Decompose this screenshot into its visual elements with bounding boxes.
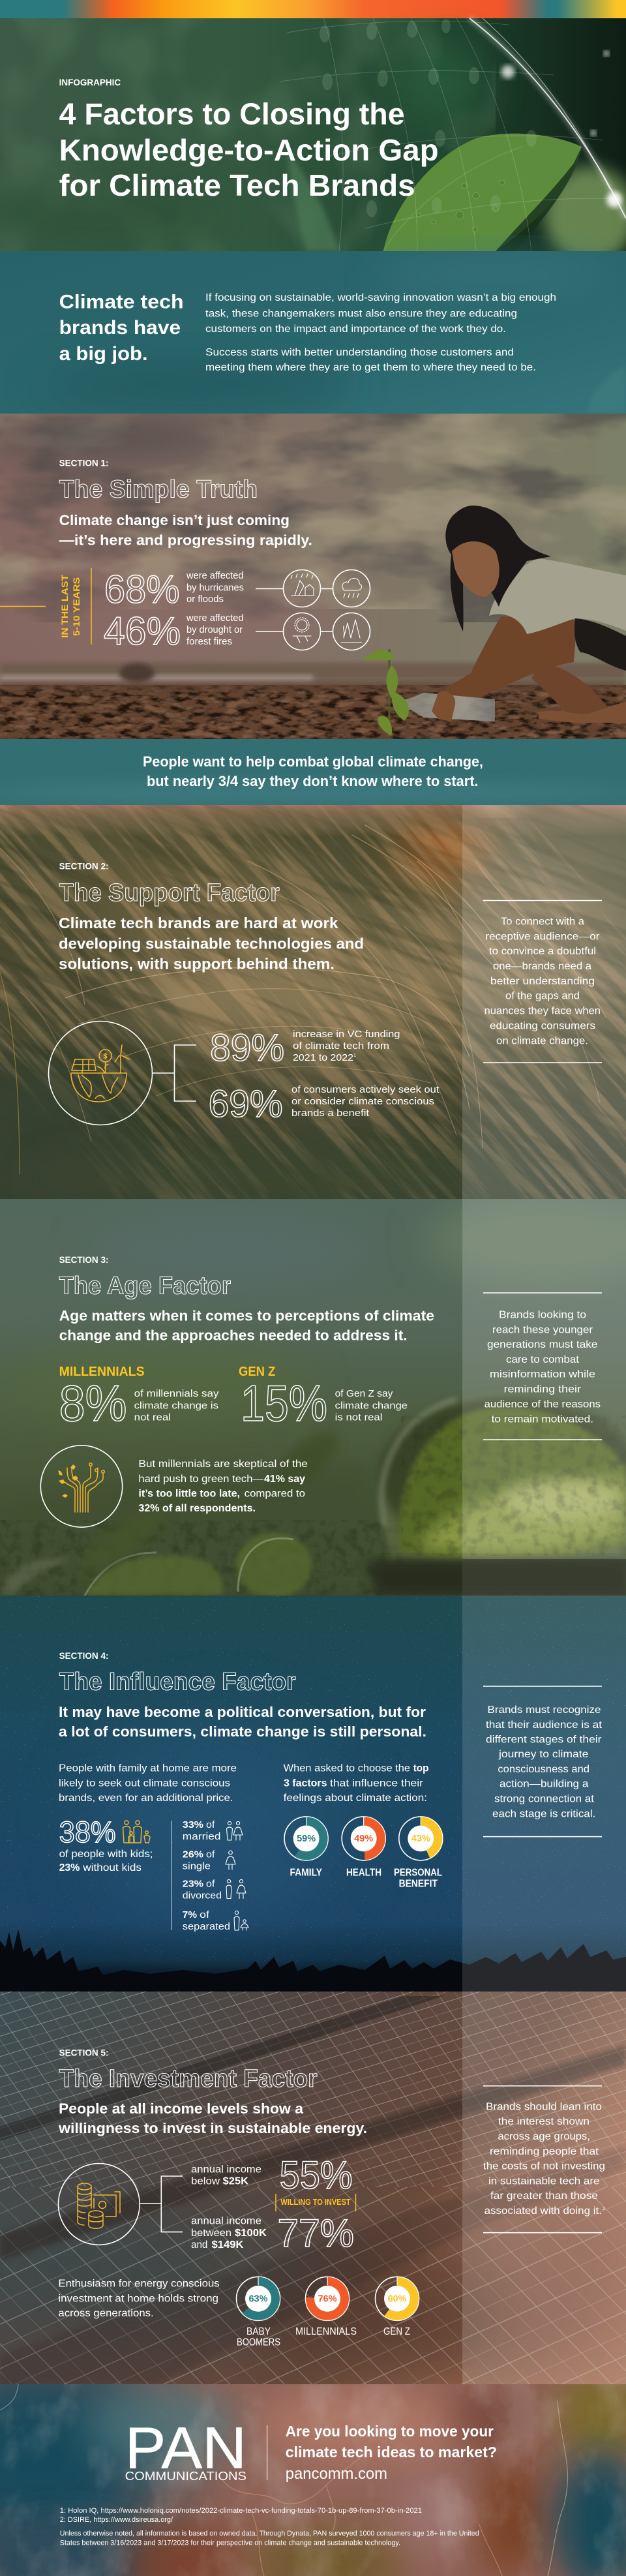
intro heading: Climate tech [59, 291, 184, 313]
callout: support takeaway: receptive audience—or [485, 932, 600, 942]
stat: gen z 15 percent [239, 1365, 408, 1432]
stat: millennials 8 percent: MILLENNIALS [59, 1365, 145, 1379]
panel: transition statement [0, 739, 626, 805]
stat: marital status breakdown: of [206, 1879, 215, 1890]
stat: marital status breakdown [183, 1819, 248, 1932]
callout: age takeaway [483, 1293, 602, 1440]
stat: 55 percent below 25k: annual income [191, 2164, 261, 2175]
panel: big job intro [0, 251, 626, 414]
main title: Knowledge-to-Action Gap [59, 133, 439, 167]
stat: 69 percent consumers [209, 1083, 440, 1125]
callout: influence takeaway: Brands must recognize [488, 1705, 601, 1716]
stat: 77 percent 100k to 149k: annual income [191, 2216, 261, 2227]
stat: 46 percent drought: forest fires [186, 636, 232, 647]
stat: 89 percent VC funding: 89% [210, 1027, 284, 1069]
section subheading [59, 512, 312, 548]
stat: 89 percent VC funding: 2021 to 2022 [293, 1052, 353, 1063]
callout: age takeaway: reminding their [504, 1384, 582, 1395]
stat: marital status breakdown: divorced [183, 1890, 222, 1901]
callout: support takeaway: educating consumers [490, 1020, 595, 1032]
stat: 38 percent with kids: 38% [59, 1815, 116, 1849]
photo: treeline silhouette [0, 1930, 626, 1992]
callout: investment takeaway: 2 [603, 2207, 605, 2211]
intro body text: task, these changemakers must also ensure they are educating [205, 308, 517, 320]
stat: 68 percent hurricanes: 68% [104, 568, 180, 611]
chart: baby boomers donut: 63% [248, 2294, 268, 2304]
intro body text [205, 292, 556, 373]
text: family at home: brands, even for an additional price. [59, 1793, 233, 1804]
intro body text: Success starts with better understanding those customers and [205, 347, 514, 358]
callout: support takeaway: of the gaps and [505, 991, 580, 1002]
section subheading: It may have become a political conversation, but for [59, 1704, 426, 1720]
callout: investment takeaway: associated with doing it. [484, 2205, 602, 2217]
chart: personal benefit donut [394, 1817, 443, 1890]
section heading: The Investment Factor [59, 2065, 318, 2093]
callout: support takeaway: To connect with a [501, 916, 584, 928]
child hair [445, 506, 551, 631]
callout: time range [0, 568, 91, 644]
section label: SECTION 2: [59, 861, 108, 871]
stat: 46 percent drought: by drought or [186, 624, 243, 635]
intro heading: brands have [59, 317, 181, 339]
hero panel [0, 18, 626, 264]
section subheading: Climate tech brands are hard at work [59, 915, 338, 932]
stat: marital status breakdown: separated [183, 1921, 230, 1932]
stat: 69 percent consumers: or consider climate conscious [291, 1096, 434, 1107]
section label: SECTION 4: [59, 1650, 108, 1661]
intro body text: meeting them where they are to get them to where they need to be. [205, 362, 536, 373]
footnotes and sources: States between 3/16/2023 and 3/17/2023 for their perspective on climate change and sustainable technology. [60, 2539, 400, 2547]
callout: support takeaway: nuances they face when [484, 1006, 601, 1016]
stat: 77 percent 100k to 149k: between [191, 2228, 231, 2239]
stat: marital status breakdown: 26% [183, 1849, 203, 1860]
logo: PAN Communications: COMMUNICATIONS [125, 2470, 246, 2483]
stat: gen z 15 percent: climate change [335, 1400, 408, 1411]
call to action text [286, 2423, 497, 2483]
panel: section 3 the age factor [0, 1194, 626, 1598]
chart: millennials donut: 76% [318, 2294, 337, 2304]
section label: SECTION 3: [59, 1254, 108, 1265]
stat: gen z 15 percent: 15% [241, 1374, 327, 1432]
stat: 77 percent 100k to 149k: $100K [235, 2228, 267, 2239]
text: top 3 factors: that influence their [330, 1778, 423, 1789]
stat: millennials 8 percent: of millennials say [134, 1388, 219, 1399]
callout: support takeaway: to convince a doubtful [489, 946, 596, 957]
stat: 89 percent VC funding: of climate tech from [293, 1040, 389, 1052]
section subheading: solutions, with support behind them. [59, 956, 335, 973]
callout: influence takeaway: action—building a [499, 1779, 589, 1790]
call to action text: Are you looking to move your [286, 2423, 494, 2440]
photo: child planting sapling [363, 506, 626, 736]
top colour bar [0, 0, 626, 18]
stat: 55 percent below 25k: 55% [280, 2153, 353, 2197]
chart: health donut [342, 1817, 385, 1879]
text: family at home [59, 1763, 237, 1804]
text: top 3 factors: When asked to choose the [284, 1763, 410, 1774]
text: millennial skepticism: 32% of all respondents. [138, 1503, 256, 1514]
stat: 38 percent with kids: 23% [59, 1862, 80, 1873]
panel: section 1 the simple truth [0, 411, 626, 740]
text: millennial skepticism: But millennials are skeptical of the [138, 1459, 308, 1470]
chart: baby boomers donut: BABY [246, 2326, 271, 2337]
chart: health donut: HEALTH [346, 1868, 381, 1879]
section heading: The Influence Factor [59, 1669, 296, 1696]
stat: 89 percent VC funding: 1 [353, 1053, 356, 1058]
text: enthusiasm statement: across generations. [58, 2308, 154, 2319]
section subheading [58, 2100, 367, 2136]
main title [59, 97, 439, 202]
stat: 69 percent consumers: of consumers actively seek out [291, 1084, 440, 1095]
stat: millennials 8 percent: not real [134, 1412, 171, 1423]
section subheading: —it’s here and progressing rapidly. [59, 532, 312, 548]
callout: investment takeaway: the costs of not investing [483, 2160, 605, 2172]
icon: family [123, 1821, 150, 1843]
section subheading: Climate change isn’t just coming [59, 512, 290, 528]
footnotes and sources: 2: DSIRE, https://www.dsireusa.org/ [60, 2516, 173, 2524]
chart: gen z donut: GEN Z [383, 2326, 410, 2337]
panel: transition statement: People want to help combat global climate change, [143, 753, 483, 770]
stat: 55 percent below 25k: $25K [223, 2176, 249, 2187]
stat: 68 percent hurricanes: were affected [186, 570, 244, 581]
stat: 38 percent with kids: without kids [82, 1862, 142, 1873]
callout: influence takeaway: journey to climate [498, 1749, 589, 1760]
icon: earth with renewable energy [48, 1022, 196, 1125]
callout: investment takeaway: reminding people that [490, 2146, 599, 2157]
stat: 38 percent with kids: of people with kids; [59, 1849, 153, 1860]
stat: gen z 15 percent: of Gen Z say [335, 1388, 393, 1399]
text: enthusiasm statement [58, 2278, 220, 2319]
text: top 3 factors: top [413, 1763, 429, 1774]
chart: millennials donut [295, 2277, 357, 2337]
panel: section 5 the investment factor [0, 1992, 626, 2394]
section subheading [59, 1704, 426, 1740]
stat: millennials 8 percent [59, 1365, 219, 1432]
stat: marital status breakdown: 33% [183, 1819, 203, 1830]
panel: section 2 the support factor [0, 805, 626, 1199]
stat: 77 percent 100k to 149k: 77% [278, 2211, 354, 2255]
callout: influence takeaway: consciousness and [498, 1764, 589, 1775]
section subheading: developing sustainable technologies and [59, 935, 364, 952]
text: millennial skepticism [138, 1459, 308, 1514]
callout: support takeaway: one—brands need a [493, 961, 591, 972]
call to action text: pancomm.com [286, 2465, 387, 2483]
stat: 55 percent below 25k [191, 2153, 353, 2197]
section subheading: change and the approaches needed to address it. [59, 1327, 408, 1344]
callout: investment takeaway: far greater than those [490, 2190, 598, 2202]
main title: for Climate Tech Brands [59, 168, 415, 202]
callout: influence takeaway: strong connection at [494, 1794, 595, 1805]
section heading: The Support Factor [59, 879, 280, 907]
text: millennial skepticism: it’s too little too late, [138, 1489, 240, 1500]
section label: SECTION 1: [59, 458, 108, 468]
text: top 3 factors: 3 factors [284, 1778, 327, 1789]
section heading: The Simple Truth [59, 476, 258, 503]
section subheading: willingness to invest in sustainable energy. [58, 2120, 367, 2136]
stat: 68 percent hurricanes: or floods [186, 594, 224, 605]
stat: marital status breakdown: single [183, 1860, 211, 1872]
chart: baby boomers donut: BOOMERS [237, 2337, 280, 2348]
text: family at home: People with family at home are more [59, 1763, 237, 1774]
callout: influence takeaway [483, 1686, 603, 1837]
icon: circuit tree [40, 1446, 123, 1527]
callout: support takeaway: better understanding [490, 976, 595, 987]
stat: gen z 15 percent: GEN Z [239, 1365, 275, 1379]
chart: family donut: 59% [297, 1834, 316, 1844]
chart: gen z donut [376, 2277, 419, 2337]
stat: 69 percent consumers: brands a benefit [291, 1108, 370, 1119]
footnotes and sources: 1: Holon IQ, https://www.holoniq.com/notes/2022-climate-tech-vc-funding-totals-70-1b-up-89-from-37-0b-in-2021 [60, 2507, 422, 2515]
main title: 4 Factors to Closing the [59, 97, 405, 130]
callout: age takeaway: to remain motivated. [492, 1414, 593, 1425]
stat: 77 percent 100k to 149k: $149K [211, 2239, 244, 2250]
callout: age takeaway: care to combat [506, 1354, 580, 1365]
photo: windblown grass [0, 805, 626, 1199]
stat: marital status breakdown: of [206, 1819, 215, 1830]
footnotes and sources: Unless otherwise noted, all information is based on owned data. Through Dynata, PAN surveyed 1000 consumers age 18+ in the United [60, 2530, 479, 2538]
chart: family donut [284, 1817, 328, 1879]
callout: investment takeaway: in sustainable tech are [488, 2176, 600, 2187]
photo: dew drops on leaf [0, 1393, 626, 1598]
callout: willing to invest [276, 2194, 356, 2211]
stat: marital status breakdown: 23% [183, 1879, 203, 1890]
photo: solar panel field [0, 1992, 626, 2394]
stat: 46 percent drought: 46% [104, 609, 181, 653]
callout: influence takeaway: each stage is critical. [492, 1809, 595, 1820]
chart: personal benefit donut: 43% [411, 1834, 430, 1844]
stat: 89 percent VC funding: increase in VC funding [293, 1029, 400, 1040]
intro body text: If focusing on sustainable, world-saving innovation wasn’t a big enough [205, 292, 556, 303]
stat: 68 percent hurricanes: by hurricanes [186, 582, 244, 594]
callout: age takeaway: generations must take [487, 1339, 598, 1350]
footnotes and sources [60, 2507, 479, 2547]
stat: 69 percent consumers: 69% [209, 1083, 283, 1125]
chart: personal benefit donut: BENEFIT [399, 1879, 438, 1890]
callout: support takeaway: on climate change. [496, 1036, 588, 1046]
panel: footer call to action [0, 2348, 626, 2576]
callout: influence takeaway: different stages of their [486, 1735, 602, 1746]
section subheading [59, 1307, 434, 1344]
stat: 68 percent hurricanes [104, 568, 370, 611]
stat: 77 percent 100k to 149k [191, 2211, 354, 2255]
section label: SECTION 5: [59, 2047, 108, 2057]
panel: section 4 the influence factor [0, 1596, 626, 1992]
section subheading [59, 915, 364, 973]
text: millennial skepticism: 41% say [264, 1474, 305, 1485]
callout: investment takeaway: Brands should lean into [486, 2102, 602, 2112]
callout: willing to invest: WILLING TO INVEST [280, 2197, 351, 2207]
stat: gen z 15 percent: is not real [335, 1412, 382, 1423]
chart: family donut: FAMILY [290, 1868, 322, 1879]
intro body text: customers on the impact and importance of the work they do. [205, 324, 506, 335]
section subheading: People at all income levels show a [59, 2100, 304, 2117]
callout: age takeaway: audience of the reasons [484, 1399, 601, 1410]
call to action text: climate tech ideas to market? [286, 2444, 497, 2461]
text: enthusiasm statement: Enthusiasm for energy conscious [58, 2278, 220, 2289]
stat: 46 percent drought: were affected [186, 613, 244, 624]
callout: age takeaway: misinformation while [490, 1369, 595, 1380]
icon: earth with renewable energy: $ [104, 1053, 108, 1061]
text: enthusiasm statement: investment at home holds strong [58, 2293, 218, 2304]
eyebrow label: INFOGRAPHIC [59, 77, 121, 87]
intro heading [59, 291, 184, 365]
background: storm clouds [0, 2348, 626, 2576]
text: millennial skepticism: hard push to green tech— [138, 1474, 264, 1485]
stat: marital status breakdown: of [206, 1849, 215, 1860]
intro heading: a big job. [59, 343, 148, 365]
text: family at home: likely to seek out climate conscious [59, 1778, 230, 1789]
chart: millennials donut: MILLENNIALS [295, 2326, 357, 2337]
chart: health donut: 49% [354, 1834, 373, 1844]
panel: transition statement: but nearly 3/4 say they don’t know where to start. [147, 773, 479, 789]
chart: baby boomers donut [236, 2277, 280, 2348]
stat: 89 percent VC funding [210, 1027, 400, 1069]
section subheading: Age matters when it comes to perceptions of climate [59, 1307, 434, 1324]
stat: 55 percent below 25k: below [191, 2176, 220, 2187]
text: top 3 factors [284, 1763, 429, 1804]
callout: investment takeaway: the interest shown [498, 2116, 589, 2127]
chart: personal benefit donut: PERSONAL [394, 1868, 442, 1879]
callout: age takeaway: Brands looking to [499, 1310, 586, 1321]
stat: 46 percent drought [104, 609, 370, 653]
section subheading: a lot of consumers, climate change is still personal. [59, 1723, 426, 1740]
chart: gen z donut: 60% [387, 2294, 407, 2304]
text: millennial skepticism: compared to [245, 1489, 305, 1500]
stat: millennials 8 percent: 8% [59, 1374, 127, 1432]
stat: 38 percent with kids [59, 1815, 153, 1873]
callout: support takeaway [483, 900, 602, 1063]
callout: time range: 5-10 YEARS [71, 577, 82, 636]
stat: millennials 8 percent: climate change is [134, 1400, 218, 1411]
callout: time range: IN THE LAST [59, 575, 70, 638]
callout: investment takeaway: across age groups, [498, 2131, 590, 2142]
stat: marital status breakdown: of [200, 1909, 210, 1920]
callout: investment takeaway [483, 2086, 605, 2233]
section heading: The Age Factor [59, 1272, 231, 1299]
stat: 77 percent 100k to 149k: and [191, 2239, 207, 2250]
stat: marital status breakdown: married [183, 1831, 220, 1842]
icon: coins and cash [58, 2164, 183, 2245]
callout: age takeaway: reach these younger [492, 1324, 593, 1336]
callout: influence takeaway: that their audience is at [486, 1720, 603, 1731]
text: top 3 factors: feelings about climate action: [284, 1793, 427, 1804]
stat: marital status breakdown: 7% [183, 1909, 197, 1920]
logo: PAN Communications: PAN [125, 2416, 246, 2481]
